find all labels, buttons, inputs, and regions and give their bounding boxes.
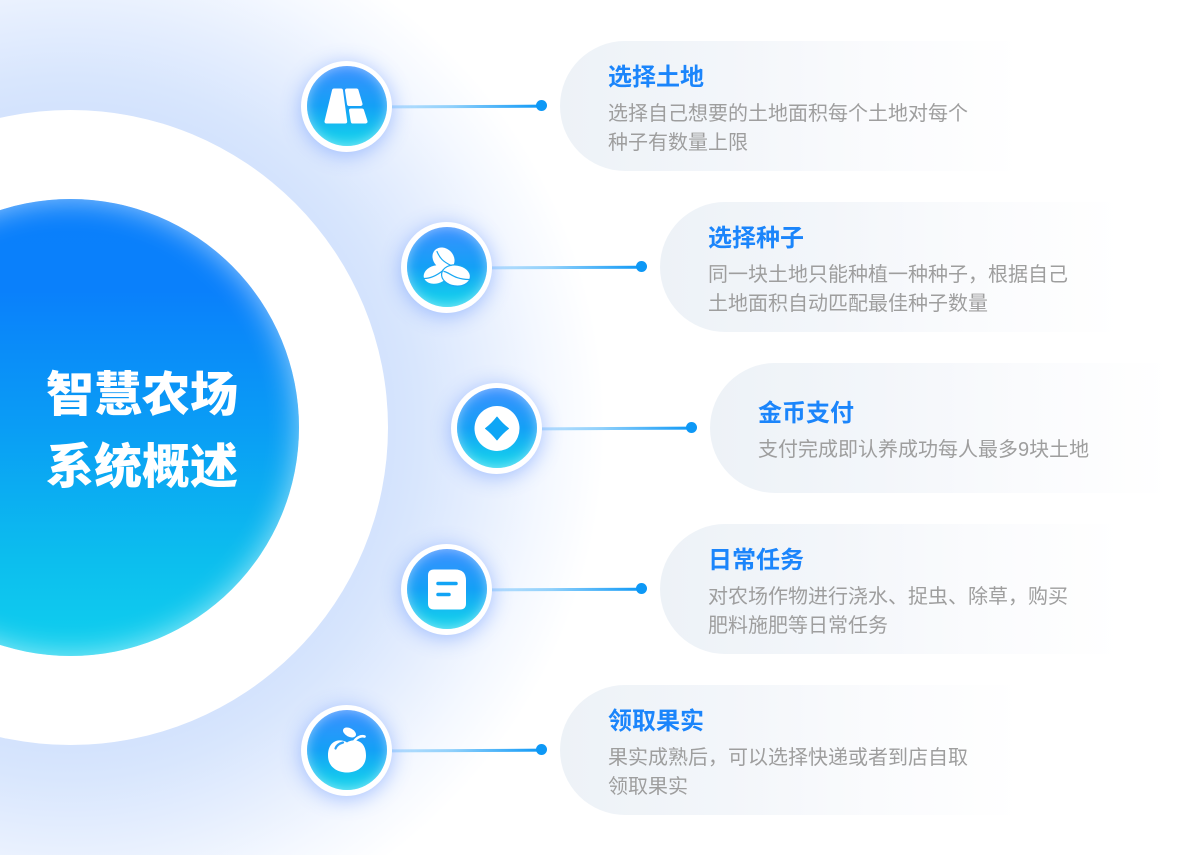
description: 支付完成即认养成功每人最多9块土地 [758,438,1089,460]
card 2: choose seeds [660,202,1140,332]
description: 同一块土地只能种植一种种子，根据自己 [708,264,1068,286]
icon: coin [474,406,520,451]
connector 2 [492,261,647,272]
heading: 选择种子 [708,225,804,252]
node 4: daily tasks [401,544,492,634]
description [708,264,1068,314]
heading: 日常任务 [708,547,804,574]
main title [46,368,238,494]
icon: coffee beans [424,248,470,287]
node 5: fruit [301,704,392,796]
card 3: coin payment [710,363,1190,493]
description [608,102,968,154]
card 1: choose land [560,41,1040,171]
description: 种子有数量上限 [608,132,748,154]
connector 1 [392,100,547,111]
description: 土地面积自动匹配最佳种子数量 [708,292,988,314]
description: 对农场作物进行浇水、捉虫、除草，购买 [708,586,1068,608]
card 5: collect fruit [560,685,1040,815]
main title: 系统概述 [46,440,238,494]
connector 3 [542,422,697,433]
card 4: daily tasks [660,524,1140,654]
description: 领取果实 [608,776,688,798]
node 2: seeds [401,222,492,312]
connector 5 [392,744,547,755]
description [608,746,968,798]
description: 果实成熟后，可以选择快递或者到店自取 [608,746,968,768]
heading: 选择土地 [608,64,704,91]
description: 肥料施肥等日常任务 [708,614,888,636]
node 1: land [301,60,392,152]
icon: apple [328,728,366,772]
description [708,586,1068,636]
main title: 智慧农场 [46,368,238,422]
heading: 金币支付 [758,400,854,427]
heading: 领取果实 [608,708,704,735]
node 3: coin [451,382,542,474]
icon: note [428,570,466,610]
description: 选择自己想要的土地面积每个土地对每个 [608,102,968,124]
central circle [0,199,298,656]
icon: land plots [324,88,368,124]
white ring [0,110,388,745]
connector 4 [492,583,647,594]
